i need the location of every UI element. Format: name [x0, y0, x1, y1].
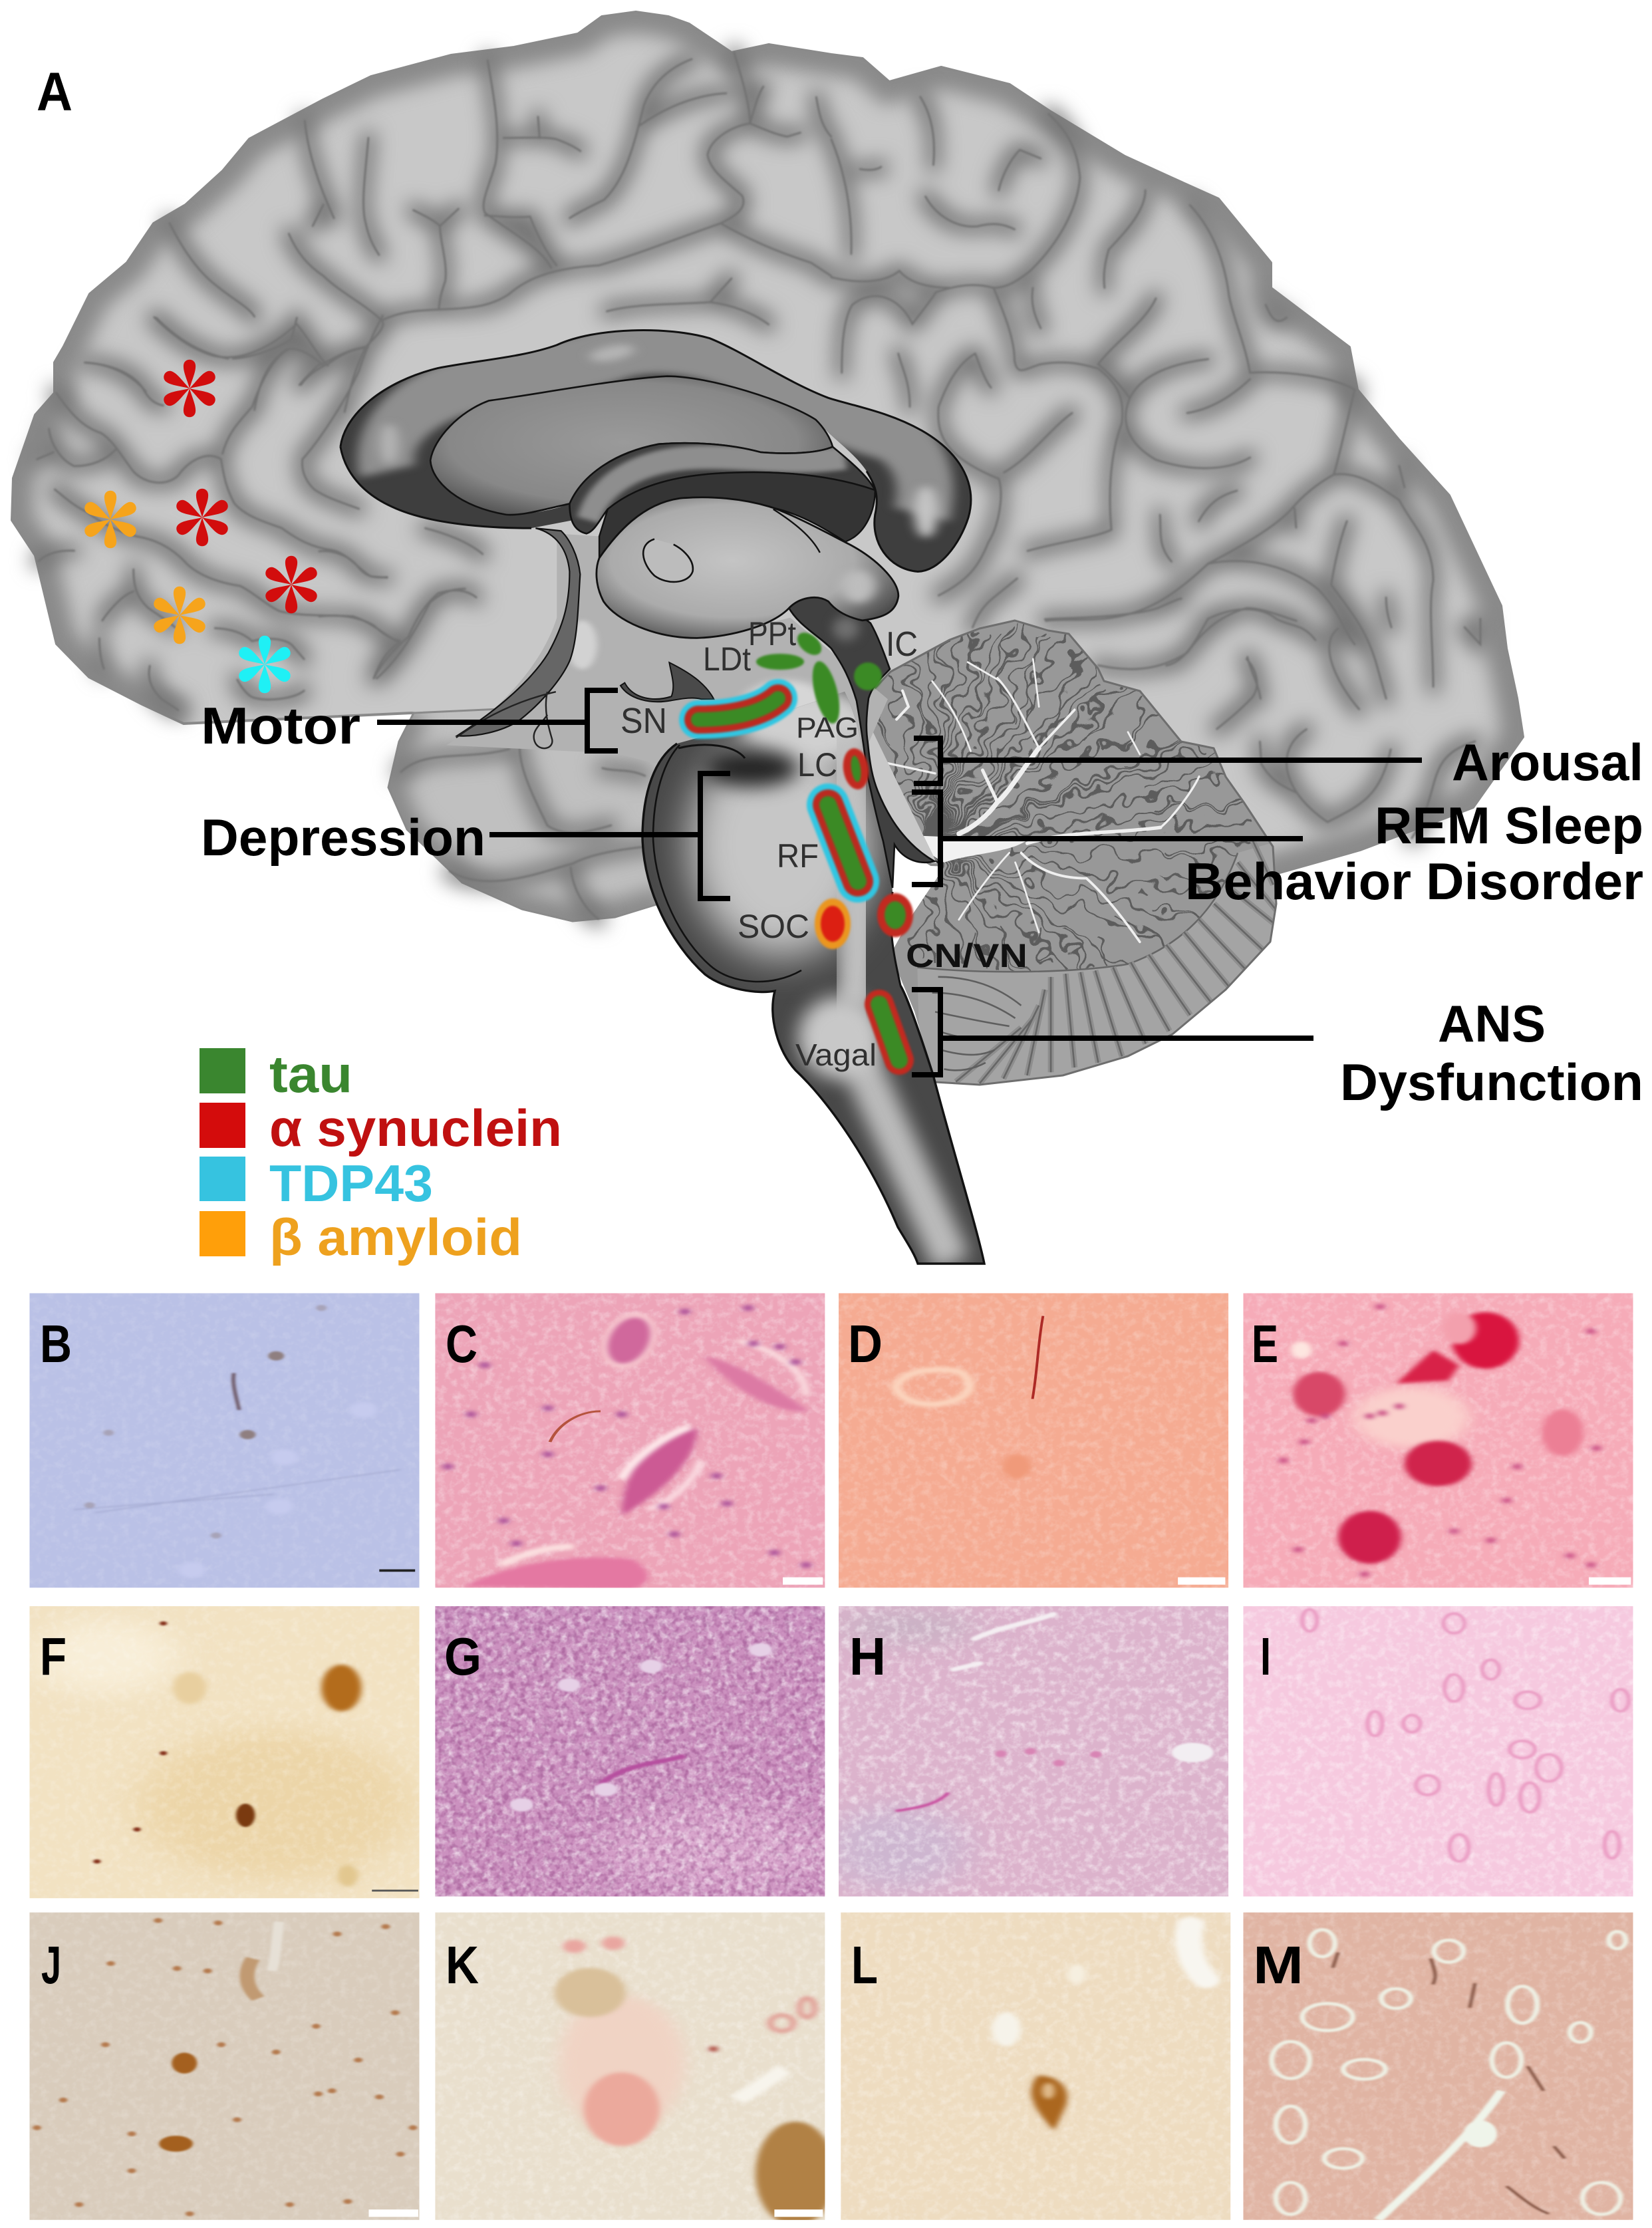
label: Dysfunction: Dysfunction: [1340, 1053, 1643, 1111]
label: REM Sleep: REM Sleep: [1375, 796, 1643, 855]
label: ANS: ANS: [1438, 994, 1546, 1053]
letter: K: K: [446, 1935, 479, 1995]
deposit: SOC: [815, 899, 851, 949]
cortical sulci: [37, 53, 1480, 919]
temporal lobe: [388, 698, 732, 921]
panel G: [435, 1606, 833, 1897]
label: SOC: SOC: [738, 908, 809, 945]
panel letters: [40, 1314, 1304, 1995]
deposit: CN/VN: [877, 893, 913, 937]
legend: TDP43: [200, 1154, 433, 1212]
dark band: [599, 472, 875, 558]
chiasm wisps: [456, 692, 556, 748]
deposit: LC: [841, 747, 871, 791]
letter: I: I: [1260, 1627, 1271, 1686]
bracket and leader: Motor: [377, 690, 618, 751]
letter: G: G: [444, 1627, 482, 1686]
mammillary body: [620, 662, 714, 702]
bracket and leader: Arousal: [914, 738, 1422, 783]
panel D: [839, 1293, 1228, 1588]
asterisk: amyloid 2: [152, 587, 207, 644]
label: Motor: Motor: [201, 696, 360, 755]
anatomical labels: [620, 615, 1028, 1072]
thalamus: [597, 497, 898, 638]
brain illustration: [12, 12, 1523, 1270]
letter: H: H: [849, 1627, 886, 1686]
legend: alpha synuclein: α synuclein: [269, 1099, 562, 1157]
letter: C: C: [446, 1314, 478, 1373]
letter: E: E: [1252, 1314, 1278, 1373]
bracket and leader: ANS dysfunction: [912, 990, 1313, 1075]
deposit: Vagal: [879, 1004, 899, 1060]
dark ventricle strip: [867, 786, 938, 863]
legend: TDP43: TDP43: [269, 1154, 433, 1212]
label: PAG: PAG: [796, 712, 859, 744]
label: CN/VN: CN/VN: [906, 937, 1028, 974]
asterisk: synuclein 2: [174, 489, 230, 546]
letter: B: B: [40, 1314, 72, 1373]
label: RF: RF: [777, 837, 819, 875]
cortical pathology asterisks: [82, 360, 319, 693]
asterisk: TDP43: [237, 636, 293, 693]
commissural structures: [319, 319, 998, 638]
panel I: [1243, 1606, 1633, 1897]
label: Arousal: Arousal: [1452, 733, 1643, 791]
label: Vagal: Vagal: [795, 1038, 877, 1072]
legend: beta amyloid: β amyloid: [269, 1208, 522, 1266]
legend: [200, 1045, 562, 1266]
letter: J: J: [41, 1935, 61, 1995]
label: LC: LC: [797, 746, 837, 783]
pons and medulla: [632, 678, 1004, 1270]
panel J: [29, 1913, 420, 2220]
panel F: [29, 1606, 420, 1898]
asterisk: amyloid 1: [82, 491, 138, 548]
fornix: [565, 439, 879, 536]
white matter tree: [883, 659, 1199, 942]
cerebellar folia: [870, 621, 1264, 970]
panel K: [435, 1913, 835, 2226]
asterisk: synuclein 3: [263, 556, 319, 613]
deposit: RF: [828, 805, 858, 881]
deposit: PAG: [807, 658, 845, 726]
label: Depression: Depression: [201, 808, 485, 867]
histology panels: [29, 1293, 1633, 2226]
letter: M: M: [1253, 1935, 1304, 1995]
deposit: PPt: [793, 628, 825, 659]
letter: L: L: [851, 1935, 878, 1995]
panel label: A: A: [37, 62, 72, 122]
legend: tau: [200, 1045, 352, 1103]
stalk and optic wedge: [457, 528, 580, 736]
asterisk: synuclein 1: [162, 360, 217, 417]
function labels: [201, 696, 1643, 1111]
pathology deposits: [698, 628, 913, 1060]
cerebrum: [12, 12, 1523, 921]
label: Behavior Disorder: Behavior Disorder: [1185, 852, 1643, 910]
label: SN: SN: [620, 701, 667, 741]
caudal folia stripes: [917, 840, 1294, 1095]
panel B: [29, 1293, 420, 1588]
letter: F: F: [40, 1627, 67, 1686]
septum: [430, 376, 833, 515]
panel L: [841, 1913, 1230, 2220]
deposit: SN: [698, 698, 778, 720]
panel E: [1243, 1293, 1633, 1588]
corpus callosum: [319, 319, 998, 580]
bracket and leader: Depression: [489, 773, 730, 899]
panel H: [822, 1606, 1228, 1897]
deposit: IC: [854, 662, 882, 690]
label: LDt: LDt: [703, 640, 751, 678]
deposit: LDt: [756, 654, 804, 670]
panel M: [1243, 1913, 1633, 2220]
label: PPt: PPt: [748, 615, 796, 652]
cerebellum: [873, 620, 1277, 1085]
legend: tau: tau: [269, 1045, 352, 1103]
tectum and fourth ventricle: [788, 593, 934, 888]
panel C: [435, 1293, 825, 1590]
label: IC: IC: [886, 625, 918, 664]
hypothalamic region: [446, 528, 888, 775]
bracket and leader: REM sleep: [912, 792, 1303, 885]
letter: D: D: [848, 1314, 883, 1373]
